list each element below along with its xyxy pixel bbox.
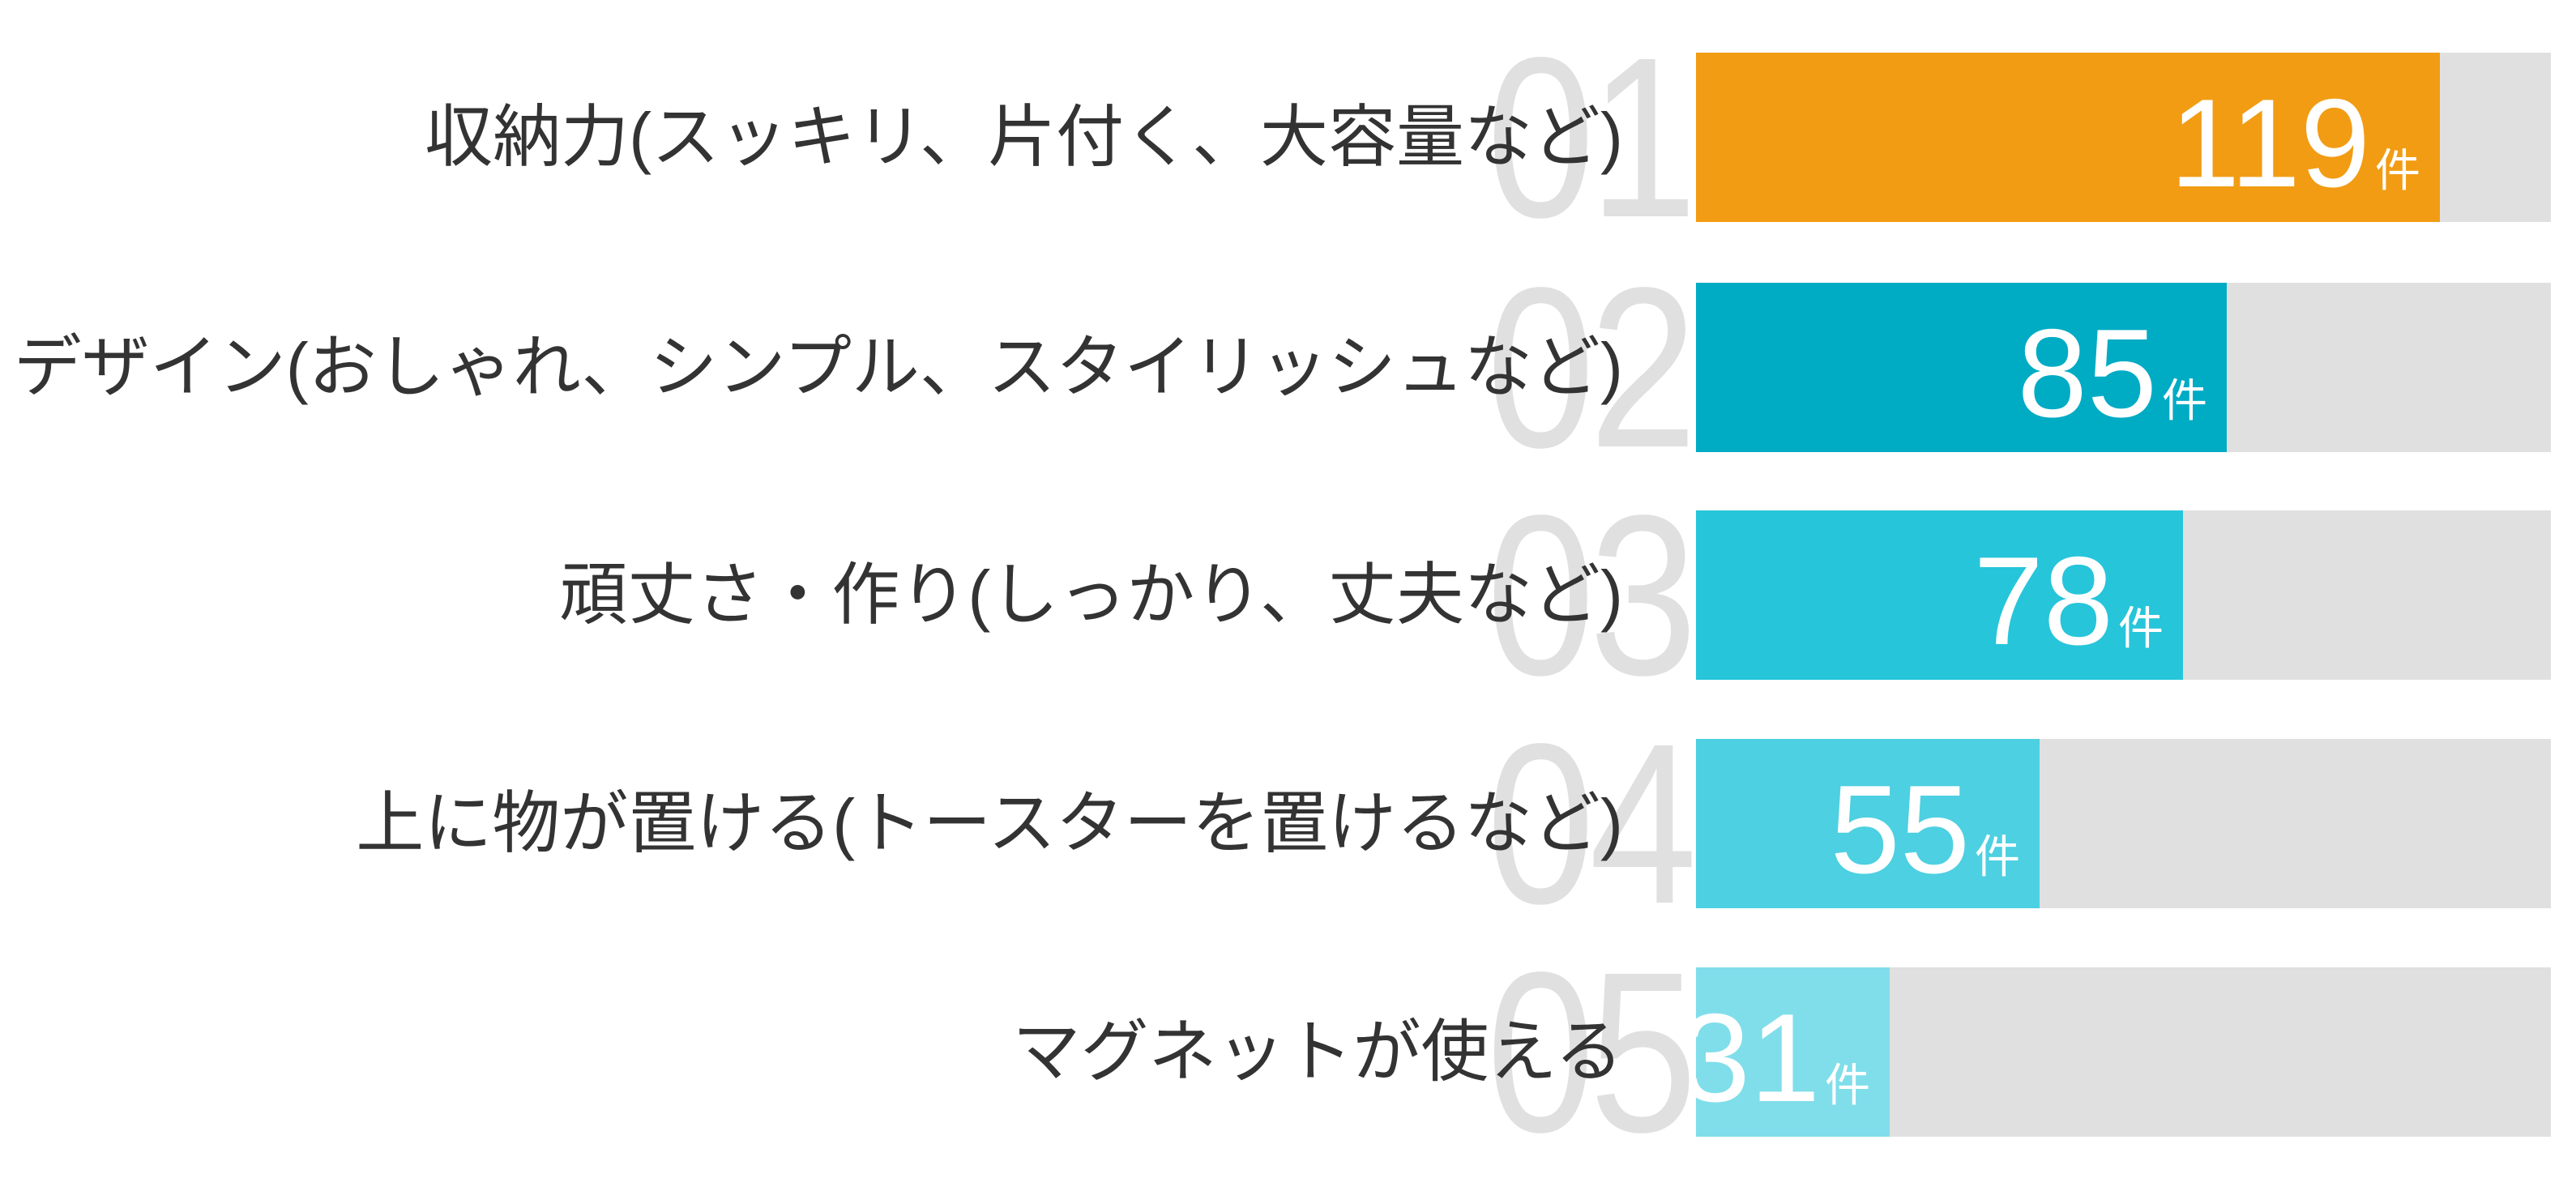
bar 3: 78 — [1974, 531, 2113, 671]
rank number 01: 01 — [1487, 10, 1692, 265]
row 1 — [425, 10, 2551, 1133]
bar 3 — [1696, 510, 2551, 680]
label 3: 頑丈さ・作り(しっかり、丈夫など) — [559, 557, 1623, 633]
bar 2: 件 — [2162, 375, 2207, 426]
row 2 — [14, 240, 2551, 1133]
rank number 03: 03 — [1487, 467, 1692, 723]
bar 1: 件 — [2375, 145, 2420, 196]
bar 4 — [1696, 739, 2551, 908]
rank number 02: 02 — [1487, 240, 1692, 495]
row 5 — [1013, 924, 2551, 1180]
label 4: 上に物が置ける(トースターを置けるなど) — [356, 785, 1623, 861]
bar 1: 119 — [2170, 73, 2370, 213]
bar 5: 件 — [1825, 1060, 1870, 1111]
rank number 04: 04 — [1487, 696, 1692, 951]
row 4 — [356, 696, 2551, 1133]
row 3 — [559, 467, 2551, 1133]
bar 4: 55 — [1831, 759, 1970, 899]
bar 5 — [1696, 967, 2551, 1137]
label 2: デザイン(おしゃれ、シンプル、スタイリッシュなど) — [14, 329, 1623, 405]
rank number 05: 05 — [1487, 924, 1692, 1180]
label 1: 収納力(スッキリ、片付く、大容量など) — [425, 99, 1623, 175]
bar 2 — [1696, 283, 2551, 452]
bar 3: 件 — [2118, 603, 2164, 654]
label 5: マグネットが使える — [1013, 1014, 1623, 1090]
bar 1 — [1696, 53, 2551, 222]
bar 2: 85 — [2018, 303, 2157, 443]
bar 4: 件 — [1975, 831, 2020, 882]
